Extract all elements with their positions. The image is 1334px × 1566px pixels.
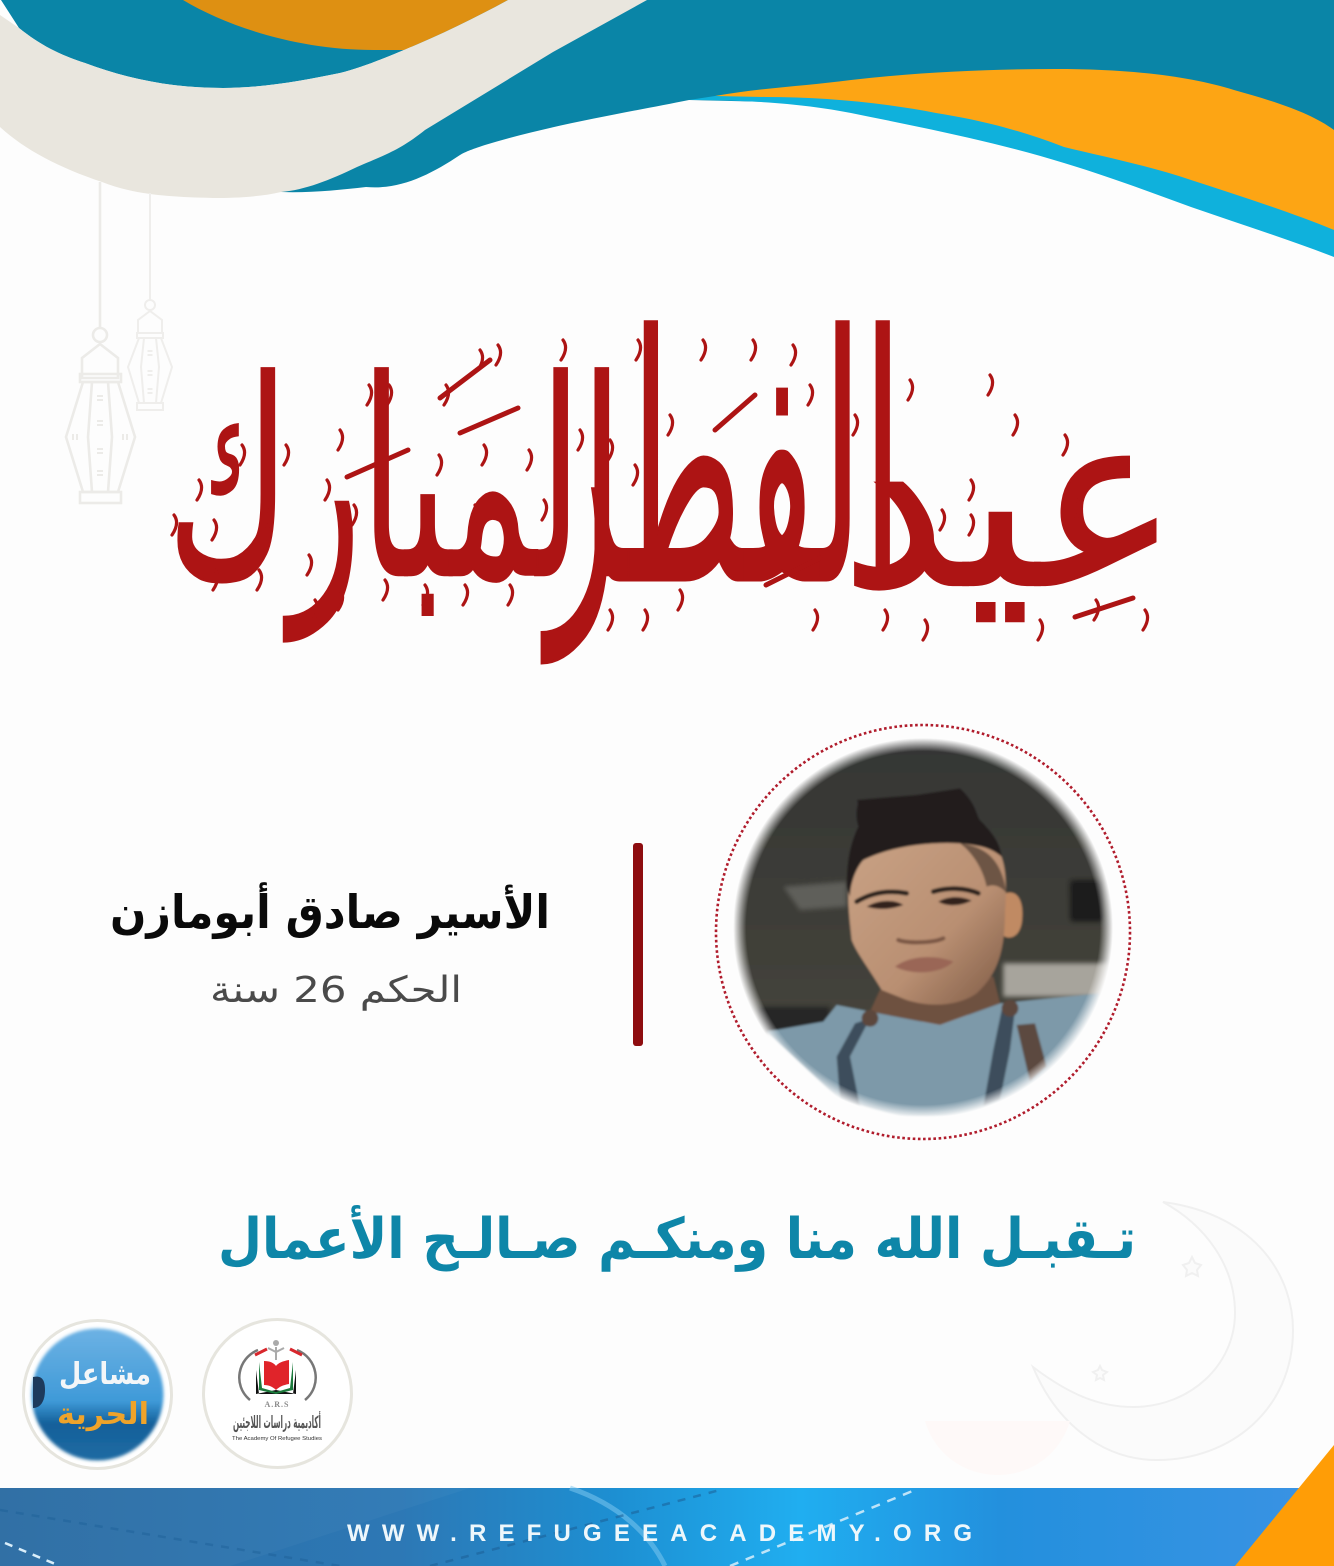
car interior details xyxy=(757,880,1110,1033)
footer band xyxy=(0,1488,1334,1566)
calligraphic title xyxy=(168,265,1179,665)
orange wave xyxy=(715,69,1334,230)
calligraphic title: الفطر xyxy=(540,265,903,665)
light blue stripe xyxy=(689,80,1334,257)
greeting line: تـقبـل الله منا ومنكـم صـالـح الأعمال xyxy=(218,1204,1136,1272)
nose xyxy=(898,938,943,942)
A.R.S: A.R.S xyxy=(264,1400,290,1409)
logo: freedom torches xyxy=(24,1320,172,1468)
footer dashed lines xyxy=(730,1490,915,1566)
english academy name: The Academy Of Refugee Studies xyxy=(232,1436,322,1442)
calligraphic title: المبارك xyxy=(168,323,622,641)
upper left teal wave xyxy=(1,0,508,88)
logo wordmark top: مشاعل xyxy=(59,1357,151,1392)
hoodie straps and zip xyxy=(837,1018,870,1107)
portrait frame dotted ring xyxy=(716,725,1130,1139)
logo wordmark bottom: الحرية xyxy=(57,1397,149,1432)
calligraphy ornament marks xyxy=(172,340,1148,640)
lantern large xyxy=(66,182,135,503)
footer light curves xyxy=(570,1488,665,1566)
sentence text: الحكم 26 سنة xyxy=(210,970,462,1011)
portrait photo xyxy=(733,737,1117,1117)
lantern small xyxy=(128,193,172,410)
footer orange corner xyxy=(1235,1445,1334,1566)
buzzed temple xyxy=(960,843,1007,893)
lips xyxy=(895,957,953,972)
divider bar xyxy=(633,843,643,1046)
decorative crescent moon xyxy=(1033,1202,1293,1460)
book xyxy=(256,1370,296,1394)
neck xyxy=(870,977,1000,1025)
cream wave xyxy=(0,0,647,198)
figure xyxy=(273,1340,279,1346)
face xyxy=(848,838,1006,1005)
main teal wave xyxy=(260,0,1334,192)
ear xyxy=(1000,893,1022,937)
prisoner name: الأسير صادق أبومازن xyxy=(110,882,550,939)
hair xyxy=(847,788,1002,897)
flag accent xyxy=(255,1349,302,1355)
calligraphic title: عيد xyxy=(841,357,1179,644)
faint pink arc xyxy=(925,1421,1070,1475)
logo: refugee academy xyxy=(204,1320,352,1468)
logo: refugee academy: أكاديمية دراسات اللاجئين xyxy=(233,1411,321,1433)
dark orange wave xyxy=(183,0,508,50)
brows and eyes xyxy=(857,889,978,902)
website url: WWW.REFUGEEACADEMY.ORG xyxy=(347,1520,972,1547)
top wave header xyxy=(0,0,1334,257)
laurel arcs xyxy=(239,1350,316,1400)
calligraphy long strokes xyxy=(347,360,1133,617)
hoodie xyxy=(767,993,1100,1117)
